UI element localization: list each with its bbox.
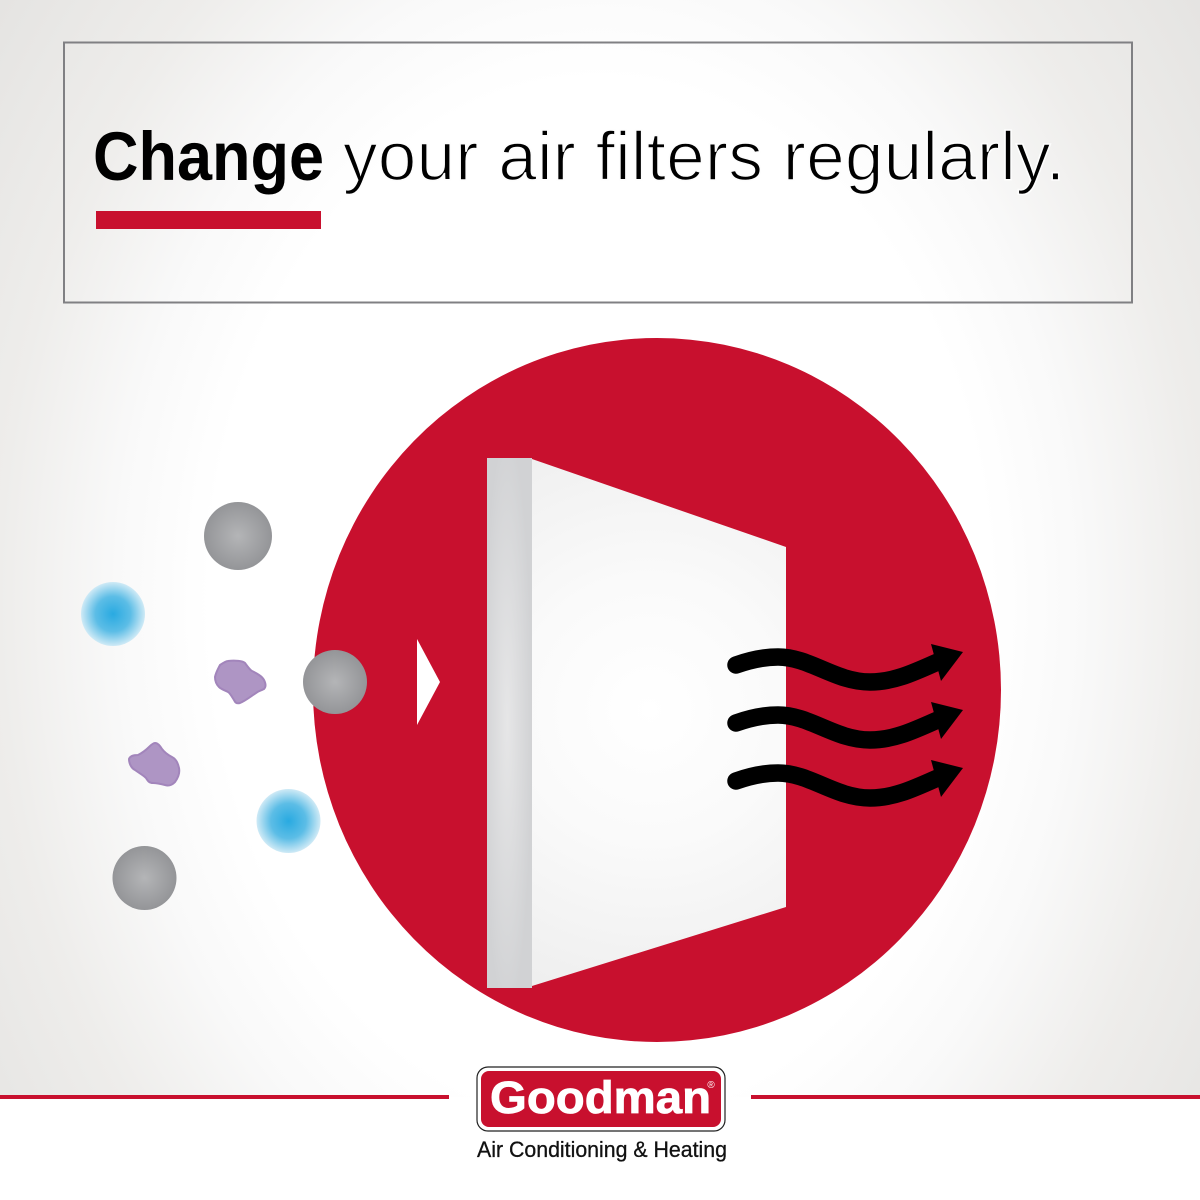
- particle: purple blob upper: [215, 661, 266, 703]
- arrow 2: [736, 702, 963, 740]
- title underline: [96, 211, 321, 229]
- particle: blue droplet top: [81, 582, 145, 646]
- title: your air filters regularly.: [343, 118, 1065, 195]
- airflow arrows: [736, 644, 963, 798]
- footer rule right: [751, 1095, 1200, 1099]
- title: Change: [93, 118, 324, 195]
- direction triangle: [417, 639, 440, 725]
- particle: purple blob lower: [129, 743, 179, 786]
- particle: grey sphere top: [204, 502, 272, 570]
- header box: [64, 42, 1132, 302]
- logo tagline: Air Conditioning & Heating: [477, 1137, 727, 1162]
- particle: grey sphere middle: [303, 650, 367, 714]
- arrow 1: [736, 644, 963, 682]
- Goodman logo: Goodman: [490, 1072, 711, 1123]
- Goodman logo: [477, 1067, 727, 1162]
- air filter: [487, 458, 786, 988]
- particle: blue droplet bottom: [256, 789, 320, 853]
- Goodman logo: ®: [707, 1080, 715, 1091]
- particle: grey sphere bottom: [112, 846, 176, 910]
- red circle: [313, 338, 1001, 1042]
- footer rule left: [0, 1095, 449, 1099]
- arrow 3: [736, 760, 963, 798]
